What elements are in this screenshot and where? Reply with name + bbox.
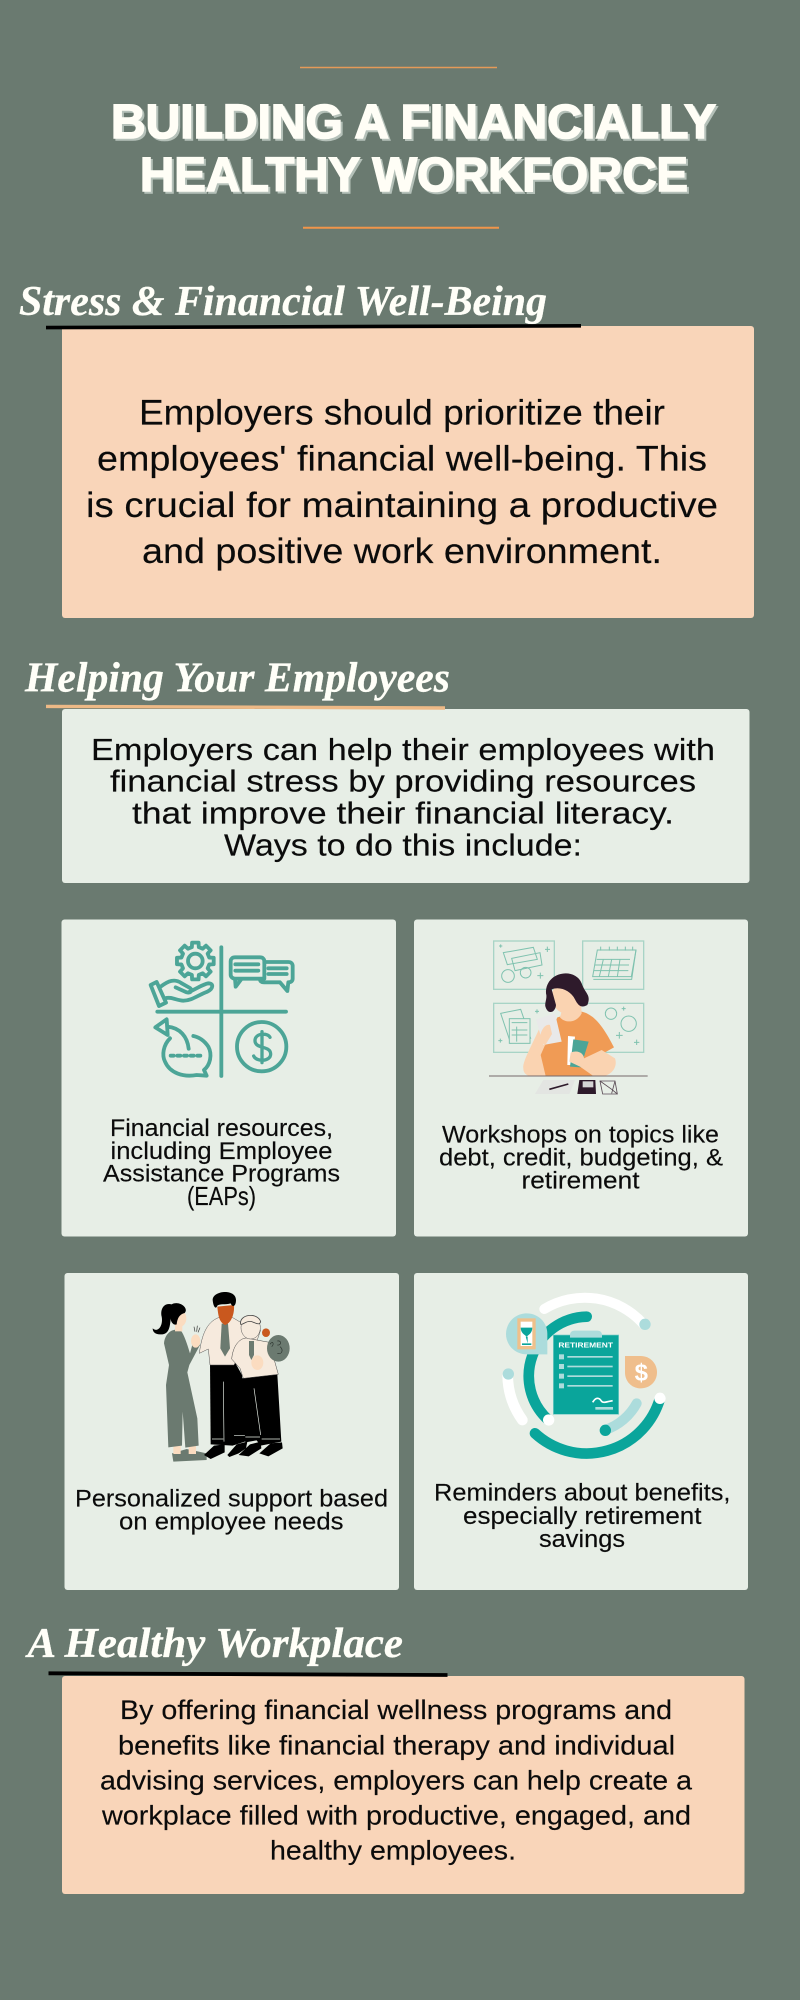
card text: workshops [439, 1122, 723, 1195]
heading: helping your employees: Helping Your Employees [24, 656, 450, 702]
icon: financial resources quadrant [151, 943, 293, 1076]
card text: financial resources: Financial resources, [110, 1115, 333, 1142]
icon: retirement clipboard [503, 1298, 666, 1453]
card text: personalized support: Personalized support based [75, 1486, 388, 1513]
card text: workshops: Workshops on topics like [442, 1122, 719, 1149]
card text: benefit reminders: especially retirement [463, 1503, 702, 1530]
text block: intro: is crucial for maintaining a productive [86, 486, 718, 525]
card text: benefit reminders [434, 1480, 730, 1553]
card: personalized support [64, 1273, 399, 1590]
card text: benefit reminders: Reminders about benefits, [434, 1480, 730, 1507]
title [111, 96, 716, 202]
text block: conclusion: benefits like financial therapy and individual [118, 1731, 675, 1761]
text block: ways to help: Employers can help their employees with [91, 732, 715, 767]
text block: ways to help: that improve their financial literacy. [132, 795, 674, 830]
card text: financial resources: (EAPs) [187, 1181, 256, 1211]
card text: workshops: debt, credit, budgeting, & [439, 1145, 723, 1172]
heading: a healthy workplace: A Healthy Workplace [24, 1621, 403, 1667]
icon: retirement clipboard: $ [635, 1360, 648, 1387]
illustration: three colleagues [153, 1292, 290, 1462]
card: financial resources [62, 920, 396, 1236]
title: BUILDING A FINANCIALLY [111, 96, 716, 149]
icon: retirement clipboard: RETIREMENT [558, 1341, 613, 1350]
text block: ways to help: Ways to do this include: [224, 827, 582, 862]
panel: stress and financial well-being [62, 326, 754, 618]
text block: intro [86, 394, 718, 571]
text block: intro: and positive work environment. [142, 532, 662, 571]
text block: conclusion: By offering financial wellness programs and [120, 1695, 672, 1725]
panel: helping your employees [62, 709, 750, 883]
text block: conclusion: healthy employees. [270, 1835, 516, 1865]
card: benefit reminders [414, 1273, 748, 1590]
card text: personalized support: on employee needs [119, 1509, 344, 1536]
panel: a healthy workplace [62, 1676, 744, 1894]
card text: personalized support [75, 1486, 388, 1536]
card text: workshops: retirement [522, 1168, 640, 1195]
heading: stress and financial well-being: Stress & Financial Well-Being [19, 279, 547, 325]
card text: financial resources: including Employee [110, 1138, 332, 1165]
card text: financial resources: Assistance Programs [103, 1161, 340, 1188]
text block: intro: employees' financial well-being. This [97, 440, 707, 478]
title: HEALTHY WORKFORCE [140, 149, 688, 202]
card text: benefit reminders: savings [539, 1526, 625, 1553]
text block: ways to help [91, 732, 715, 862]
card: workshops [414, 920, 748, 1236]
text block: intro: Employers should prioritize their [139, 394, 665, 432]
text block: conclusion [100, 1695, 693, 1865]
text block: ways to help: financial stress by providing resources [110, 764, 696, 799]
text block: conclusion: workplace filled with productive, engaged, and [101, 1801, 691, 1831]
card text: financial resources [103, 1115, 340, 1211]
illustration: woman reviewing finances [489, 941, 648, 1094]
text block: conclusion: advising services, employers can help create a [100, 1765, 693, 1795]
